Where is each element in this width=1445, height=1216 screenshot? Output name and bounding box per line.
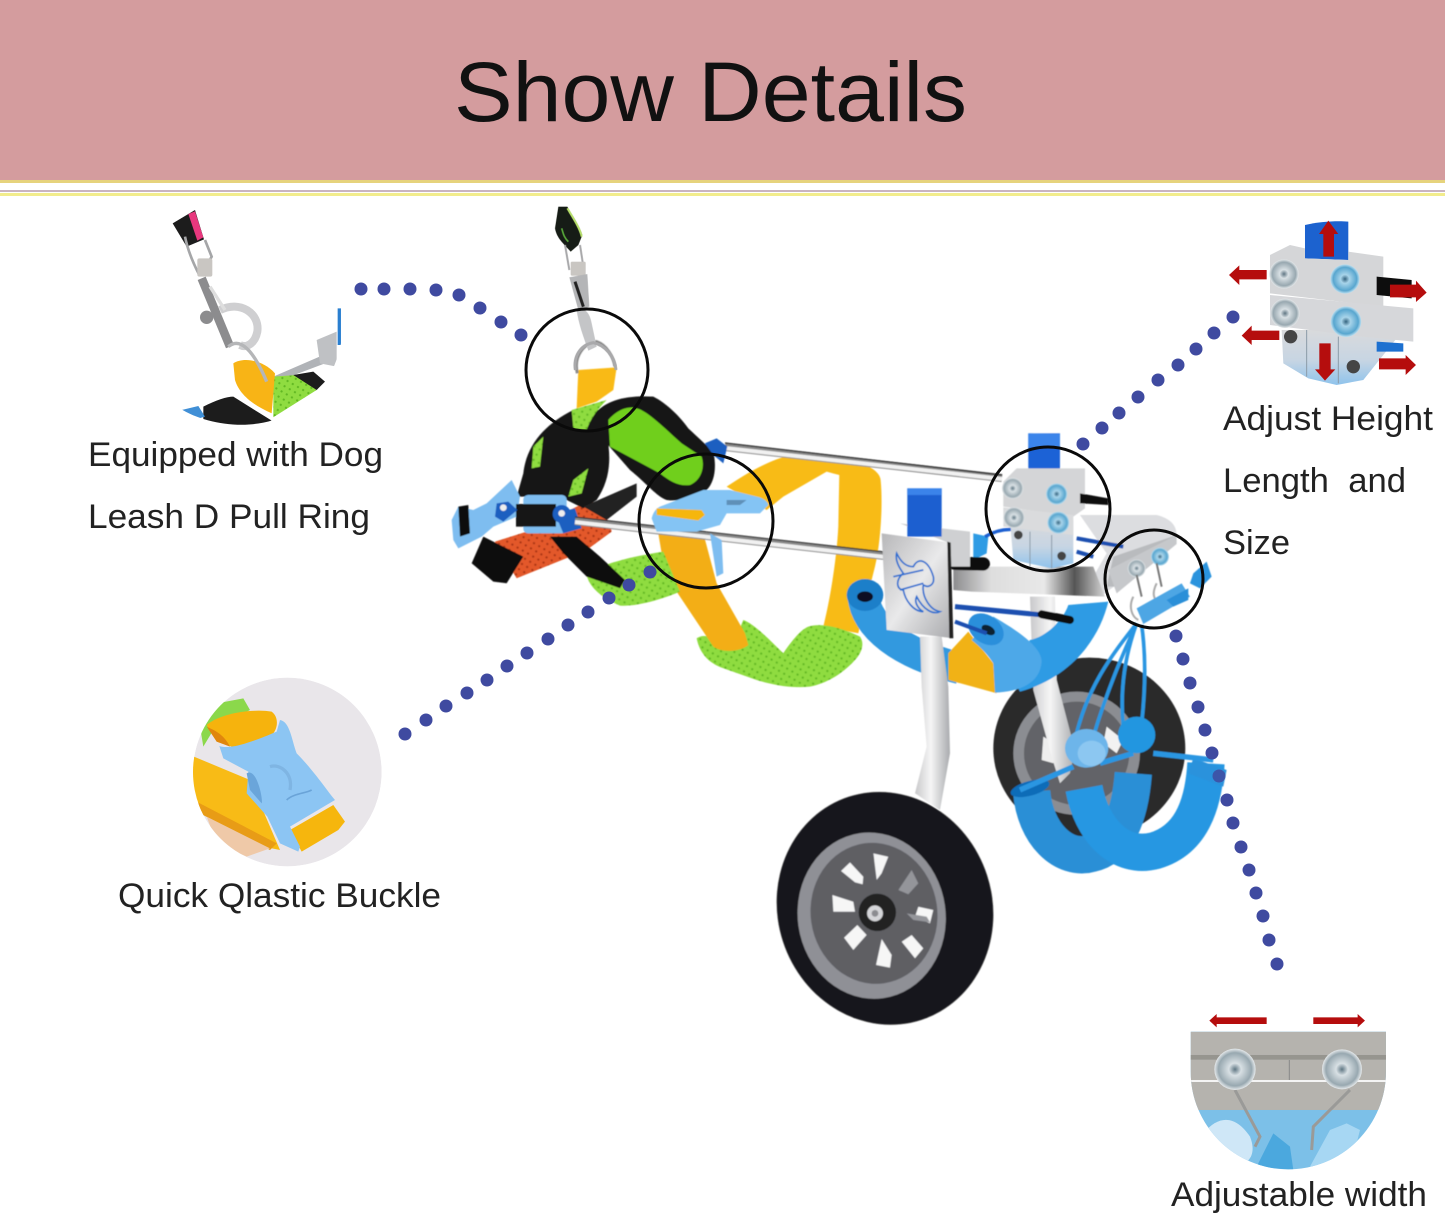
front wheel — [747, 764, 1023, 1053]
rear adjustable bracket — [985, 433, 1123, 568]
header banner — [0, 0, 1445, 196]
label: quick buckle: Quick Qlastic Buckle — [118, 877, 441, 915]
right side of belt buckle — [652, 490, 768, 577]
harness — [452, 342, 715, 606]
frame rods — [575, 443, 1002, 557]
inset: D pull ring — [173, 210, 341, 433]
label: D pull ring: Equipped with Dog — [88, 436, 383, 474]
rear wheel — [993, 658, 1185, 839]
title: Show Details — [454, 45, 967, 139]
upper rod cap — [705, 438, 727, 463]
inset: adjustable width with arrows — [1190, 1014, 1386, 1170]
label: adjustable width: Adjustable width — [1171, 1176, 1427, 1214]
dotted connector: bracket to height inset — [1076, 310, 1240, 450]
hanging leash above D ring — [555, 207, 616, 370]
label: adjust height: Adjust Height — [1223, 400, 1434, 438]
label: adjust height: Length and — [1223, 462, 1406, 500]
dotted connector: leash inset to D ring — [354, 282, 528, 342]
dotted connector: clip to width inset — [1170, 630, 1284, 970]
label: adjust height: Size — [1223, 524, 1290, 562]
label: adjust height — [1223, 400, 1434, 562]
upper frame arm — [1080, 515, 1177, 597]
rear foam slings and bungee cords — [1009, 623, 1227, 855]
yellow belts and green pad — [658, 456, 882, 687]
front foam sling and side plate — [847, 488, 1108, 810]
inset: quick buckle — [190, 678, 382, 866]
width adjuster and clip — [1108, 535, 1212, 624]
inset: adjustable bracket with arrows — [1229, 221, 1427, 385]
callout circles on product — [526, 309, 1203, 628]
label: D pull ring — [88, 436, 383, 536]
dotted connector: buckle inset to buckle — [398, 566, 656, 740]
rear strut — [1030, 597, 1075, 783]
wheelchair product photo — [452, 342, 1227, 1053]
label: D pull ring: Leash D Pull Ring — [88, 498, 370, 536]
